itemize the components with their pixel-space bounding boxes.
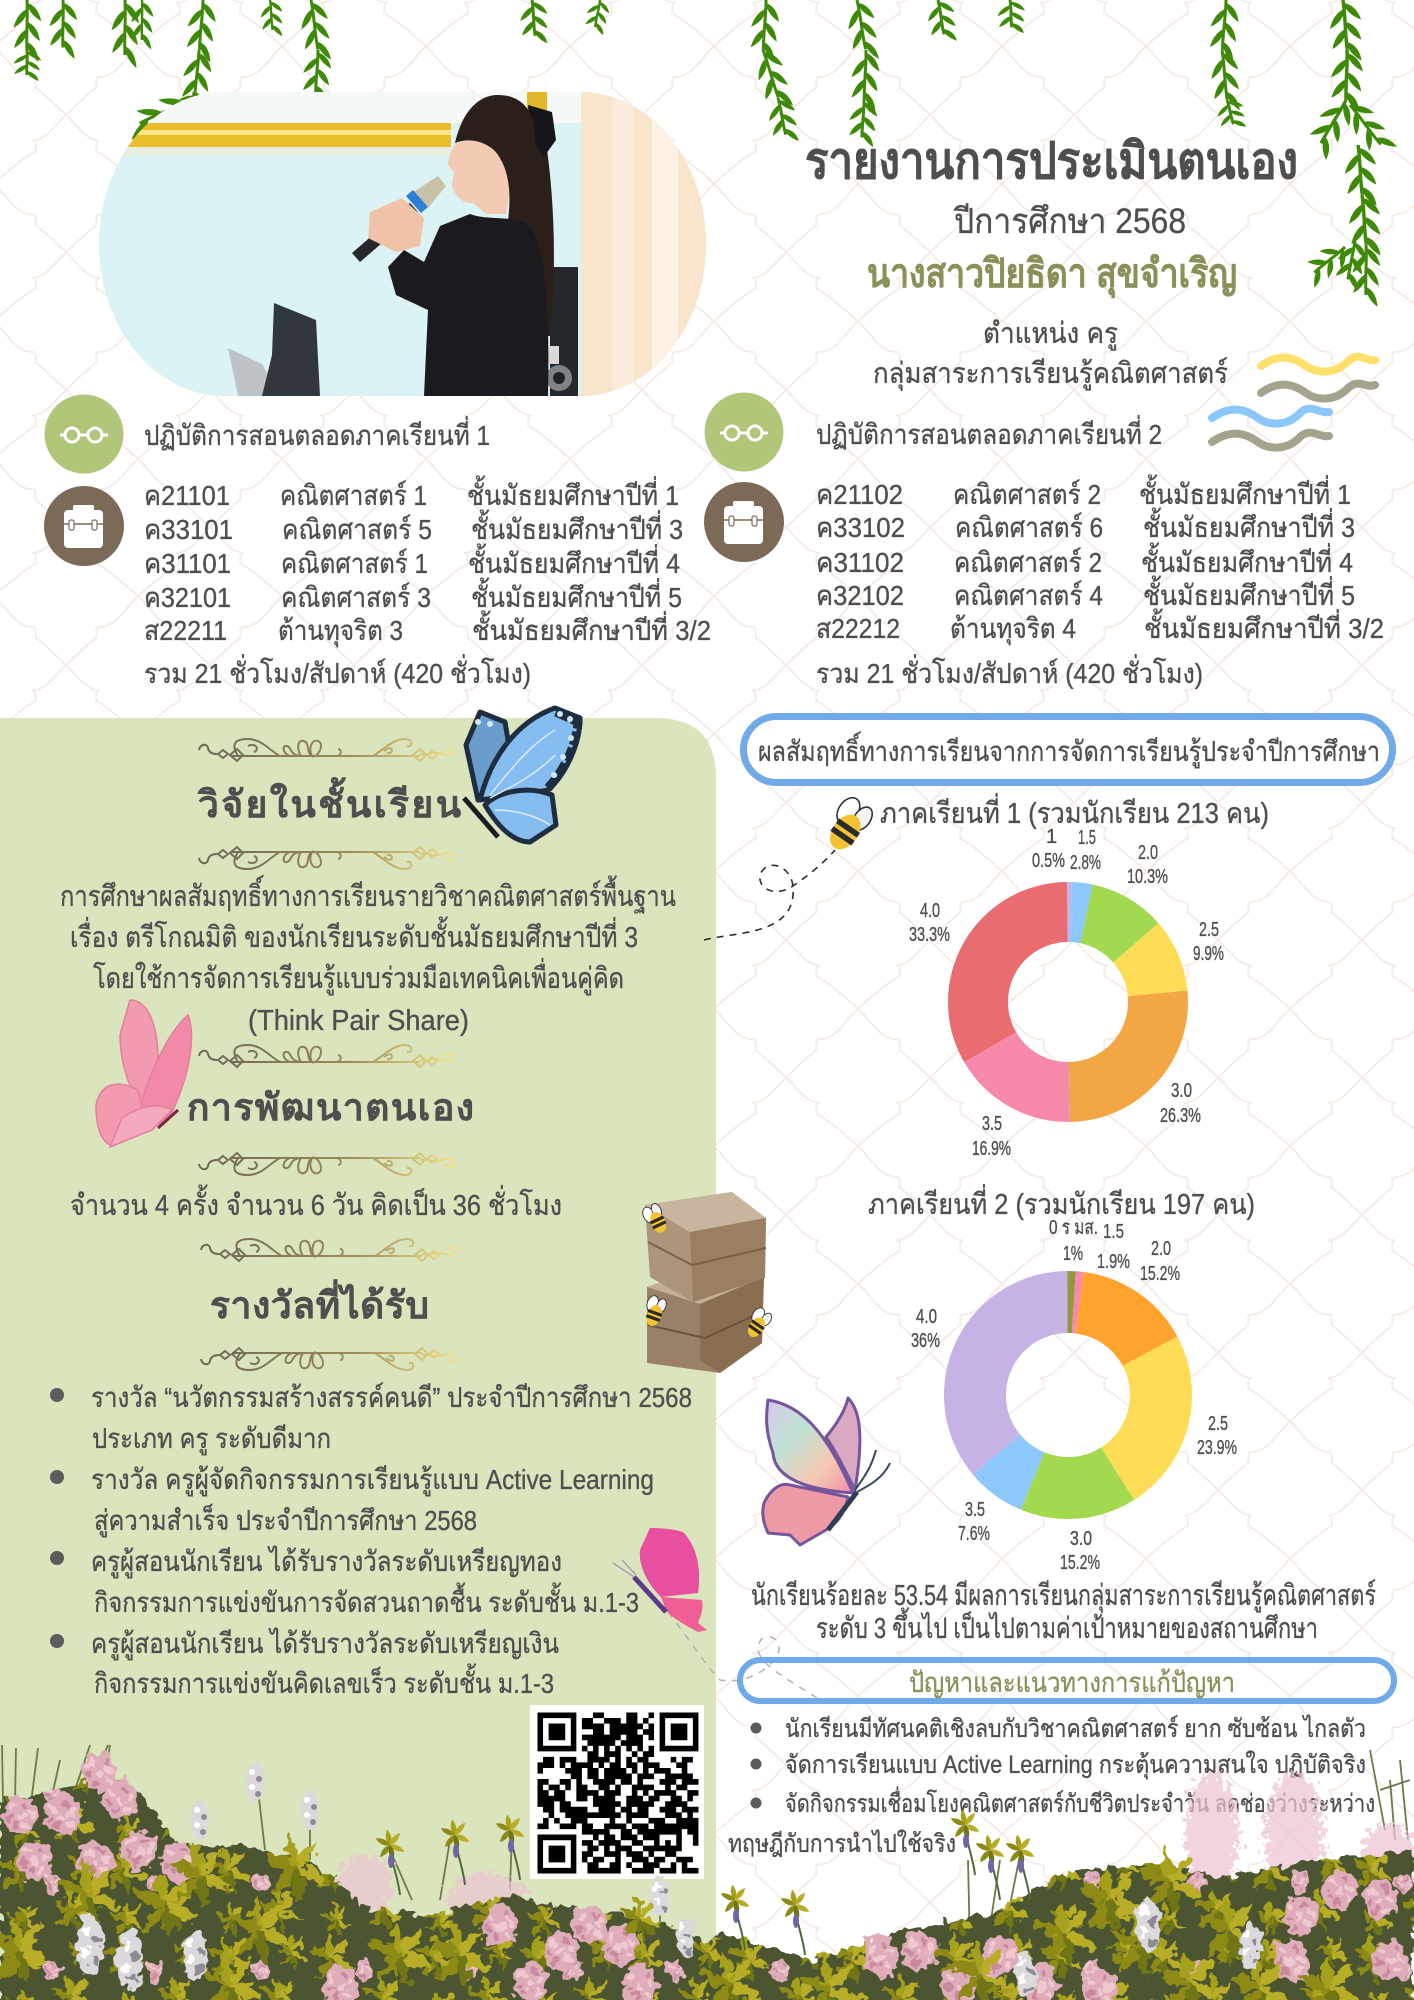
- course row 4: [816, 575, 1355, 611]
- total hours semester 1: รวม 21 ชั่วโมง/สัปดาห์ (420 ชั่วโมง): [144, 654, 531, 689]
- course row 5: ต้านทุจริต 4: [950, 613, 1076, 646]
- hanging vines: [11, 0, 1402, 308]
- title: รายงานการประเมินตนเอง: [805, 133, 1298, 189]
- teaching load: semester 1: [144, 416, 711, 689]
- award 3: กิจกรรมการแข่งขันการจัดสวนถาดชื้น ระดับชั้น ม.1-3: [94, 1582, 639, 1618]
- item 3: ทฤษฎีกับการนำไปใช้จริง: [728, 1829, 956, 1858]
- course row 4: คณิตศาสตร์ 3: [281, 582, 431, 613]
- iris flowers: [375, 1810, 1035, 1955]
- panel: green left column: [0, 718, 716, 2000]
- icon: bag, semester 2: [704, 482, 784, 562]
- donut labels: semester 1: 3.5: [982, 1113, 1002, 1135]
- course row 2: ค33101: [144, 514, 233, 545]
- olive leaf clusters: [0, 1834, 1363, 2000]
- course row 2: [144, 509, 683, 545]
- donut labels: semester 1: 33.3%: [909, 924, 950, 946]
- department: กลุ่มสาระการเรียนรู้คณิตศาสตร์: [873, 357, 1228, 391]
- ornament 5: [201, 1239, 456, 1261]
- pill heading: learning achievement: [744, 716, 1392, 782]
- course row 4: คณิตศาสตร์ 4: [954, 580, 1103, 611]
- donut labels: semester 2: 36%: [911, 1330, 940, 1352]
- heading semester 2: ปฏิบัติการสอนตลอดภาคเรียนที่ 2: [816, 415, 1162, 450]
- course row 5: ส22212: [816, 613, 900, 644]
- dashed flight trail from pink butterfly: [668, 1612, 820, 1700]
- donut chart: semester 2: [975, 1302, 1161, 1488]
- ornament 6: [201, 1348, 456, 1370]
- award 2: สู่ความสำเร็จ ประจำปีการศึกษา 2568: [94, 1503, 477, 1538]
- beehive with bees: [640, 1192, 774, 1373]
- course row 3: [144, 543, 680, 579]
- course row 2: [816, 507, 1355, 543]
- donut labels: semester 2: 0 ร มส.: [1049, 1217, 1098, 1239]
- white flower spikes: [76, 1875, 1261, 1999]
- course row 1: [144, 475, 679, 511]
- donut labels: semester 1: 26.3%: [1160, 1105, 1201, 1127]
- pink blooms: [2, 1752, 1408, 2000]
- award 1: รางวัล “นวัตกรรมสร้างสรรค์คนดี” ประจำปีการศึกษา 2568: [91, 1382, 692, 1413]
- heading: classroom research: วิจัยในชั้นเรียน: [197, 777, 461, 825]
- research description: เรื่อง ตรีโกณมิติ ของนักเรียนระดับชั้นมัธยมศึกษาปีที่ 3: [70, 916, 638, 954]
- course row 5: ชั้นมัธยมศึกษาปีที่ 3/2: [472, 610, 711, 646]
- flowers: bottom garden border: [0, 1745, 1414, 2000]
- magenta butterfly: [613, 1528, 707, 1632]
- course row 1: ชั้นมัธยมศึกษาปีที่ 1: [467, 475, 679, 511]
- icon: glasses, semester 2: [704, 392, 784, 472]
- QR code: [530, 1705, 704, 1879]
- summary statement: [751, 1579, 1376, 1645]
- thin stems: [2, 1745, 1410, 1960]
- academic year: ปีการศึกษา 2568: [953, 202, 1186, 241]
- donut labels: semester 2: 3.0: [1070, 1528, 1092, 1550]
- donut labels: semester 1: 0.5%: [1032, 850, 1065, 872]
- blue butterfly: [464, 708, 580, 842]
- teaching load: semester 2: [816, 415, 1384, 689]
- chart title: semester 1: ภาคเรียนที่ 1 (รวมนักเรียน 213 คน): [880, 793, 1269, 830]
- chart title: semester 2: ภาคเรียนที่ 2 (รวมนักเรียน 197 คน): [868, 1184, 1255, 1221]
- total hours semester 2: รวม 21 ชั่วโมง/สัปดาห์ (420 ชั่วโมง): [816, 654, 1203, 689]
- course row 4: ค32101: [144, 582, 231, 613]
- course row 3: ชั้นมัธยมศึกษาปีที่ 4: [468, 543, 680, 579]
- course row 5: ส22211: [144, 615, 227, 646]
- pill heading: problems and solutions: [740, 1660, 1394, 1701]
- decorative squiggles: [1212, 357, 1375, 448]
- donut labels: semester 1: 4.0: [920, 900, 940, 922]
- ornament 3: [199, 1045, 454, 1067]
- course row 5: ต้านทุจริต 3: [278, 615, 403, 648]
- course row 1: คณิตศาสตร์ 1: [280, 480, 427, 511]
- donut labels: semester 1: 9.9%: [1193, 943, 1224, 965]
- course row 3: [816, 542, 1353, 578]
- research description: โดยใช้การจัดการเรียนรู้แบบร่วมมือเทคนิคเพื่อนคู่คิด: [93, 958, 624, 996]
- course row 5: [816, 608, 1384, 646]
- donut labels: semester 1: [909, 826, 1224, 1160]
- research description: [60, 875, 676, 1037]
- icon: glasses, semester 1: [44, 394, 124, 474]
- teacher name: นางสาวปิยธิดา สุขจำเริญ: [867, 252, 1237, 299]
- course row 4: ค32102: [816, 580, 904, 611]
- donut labels: semester 1: 2.8%: [1070, 852, 1101, 874]
- donut labels: semester 2: 3.5: [965, 1499, 985, 1521]
- course row 2: ค33102: [816, 512, 905, 543]
- award 1: [50, 1382, 692, 1456]
- donut labels: semester 1: 16.9%: [972, 1138, 1011, 1160]
- self development summary: จำนวน 4 ครั้ง จำนวน 6 วัน คิดเป็น 36 ชั่วโมง: [70, 1184, 562, 1222]
- donut labels: semester 1: 2.5: [1199, 919, 1219, 941]
- donut labels: semester 2: 1.5: [1103, 1221, 1124, 1243]
- course row 2: ชั้นมัธยมศึกษาปีที่ 3: [471, 509, 683, 545]
- pill heading: problems and solutions: ปัญหาและแนวทางการแก้ปัญหา: [909, 1667, 1235, 1698]
- awards list: [50, 1382, 692, 1699]
- donut labels: semester 1: 3.0: [1171, 1080, 1192, 1102]
- course row 5: [144, 610, 711, 648]
- course row 4: [144, 577, 682, 613]
- ornament 4: [199, 1153, 454, 1175]
- course row 2: คณิตศาสตร์ 5: [282, 514, 432, 545]
- research description: การศึกษาผลสัมฤทธิ์ทางการเรียนรายวิชาคณิตศาสตร์พื้นฐาน: [60, 875, 676, 914]
- donut labels: semester 2: 15.2%: [1140, 1263, 1180, 1285]
- donut labels: semester 1: 1.5: [1078, 827, 1096, 849]
- donut labels: semester 2: 1%: [1063, 1243, 1083, 1265]
- rainbow butterfly: [763, 1398, 890, 1545]
- donut labels: semester 2: [911, 1217, 1237, 1574]
- donut labels: semester 1: 1: [1046, 826, 1057, 848]
- heading semester 1: ปฏิบัติการสอนตลอดภาคเรียนที่ 1: [144, 416, 490, 451]
- award 4: ครูผู้สอนนักเรียน ได้รับรางวัลระดับเหรียญเงิน: [91, 1628, 559, 1661]
- donut labels: semester 2: 4.0: [916, 1306, 937, 1328]
- course row 3: ชั้นมัธยมศึกษาปีที่ 4: [1141, 542, 1353, 578]
- dashed flight trail from bee: [704, 850, 835, 940]
- donut labels: semester 1: 10.3%: [1127, 866, 1168, 888]
- tall white flowers: [191, 1762, 319, 1840]
- award 2: รางวัล ครูผู้จัดกิจกรรมการเรียนรู้แบบ Active Learning: [91, 1464, 654, 1497]
- donut labels: semester 2: 2.5: [1208, 1413, 1228, 1435]
- course row 1: คณิตศาสตร์ 2: [953, 479, 1101, 510]
- heading: awards received: รางวัลที่ได้รับ: [210, 1279, 429, 1326]
- donut labels: semester 2: 23.9%: [1197, 1437, 1237, 1459]
- problems list: [728, 1714, 1375, 1858]
- course row 3: ค31101: [144, 548, 231, 579]
- pink butterfly: [96, 1000, 191, 1147]
- pink feather plumes: [337, 1773, 1414, 1928]
- item 3: [728, 1786, 1375, 1858]
- position: ตำแหน่ง ครู: [983, 318, 1118, 351]
- donut labels: semester 2: 2.0: [1151, 1238, 1171, 1260]
- award 1: ประเภท ครู ระดับดีมาก: [92, 1423, 331, 1456]
- course row 2: คณิตศาสตร์ 6: [955, 512, 1103, 543]
- heading: self development: การพัฒนาตนเอง: [187, 1087, 474, 1128]
- icon: bag, semester 1: [44, 486, 124, 566]
- award 4: [50, 1628, 559, 1699]
- course row 4: ชั้นมัธยมศึกษาปีที่ 5: [471, 577, 682, 613]
- award 4: กิจกรรมการแข่งขันคิดเลขเร็ว ระดับชั้น ม.1-3: [94, 1663, 554, 1699]
- course row 3: คณิตศาสตร์ 1: [281, 548, 428, 579]
- donut labels: semester 2: 7.6%: [958, 1523, 990, 1545]
- donut labels: semester 2: 1.9%: [1097, 1251, 1130, 1273]
- award 3: ครูผู้สอนนักเรียน ได้รับรางวัลระดับเหรียญทอง: [91, 1546, 562, 1579]
- course row 2: ชั้นมัธยมศึกษาปีที่ 3: [1143, 507, 1355, 543]
- course row 1: ค21101: [144, 480, 230, 511]
- award 3: [50, 1546, 639, 1618]
- course row 3: คณิตศาสตร์ 2: [954, 547, 1102, 578]
- donut labels: semester 2: 15.2%: [1060, 1552, 1100, 1574]
- research description: (Think Pair Share): [248, 1005, 469, 1037]
- course row 1: ชั้นมัธยมศึกษาปีที่ 1: [1139, 474, 1351, 510]
- donut labels: semester 1: 2.0: [1138, 842, 1158, 864]
- icon: bee: [819, 793, 876, 856]
- foliage mass: [0, 1752, 1414, 2000]
- award 2: [50, 1464, 654, 1538]
- course row 4: ชั้นมัธยมศึกษาปีที่ 5: [1143, 575, 1355, 611]
- ornament 1: [199, 739, 454, 761]
- ornament 2: [199, 847, 454, 869]
- donut chart: semester 1: [978, 912, 1158, 1092]
- course row 5: ชั้นมัธยมศึกษาปีที่ 3/2: [1144, 608, 1384, 644]
- course row 1: [816, 474, 1351, 510]
- course row 3: ค31102: [816, 547, 904, 578]
- course row 1: ค21102: [816, 479, 903, 510]
- photo: teacher speaking into a microphone: [99, 92, 706, 396]
